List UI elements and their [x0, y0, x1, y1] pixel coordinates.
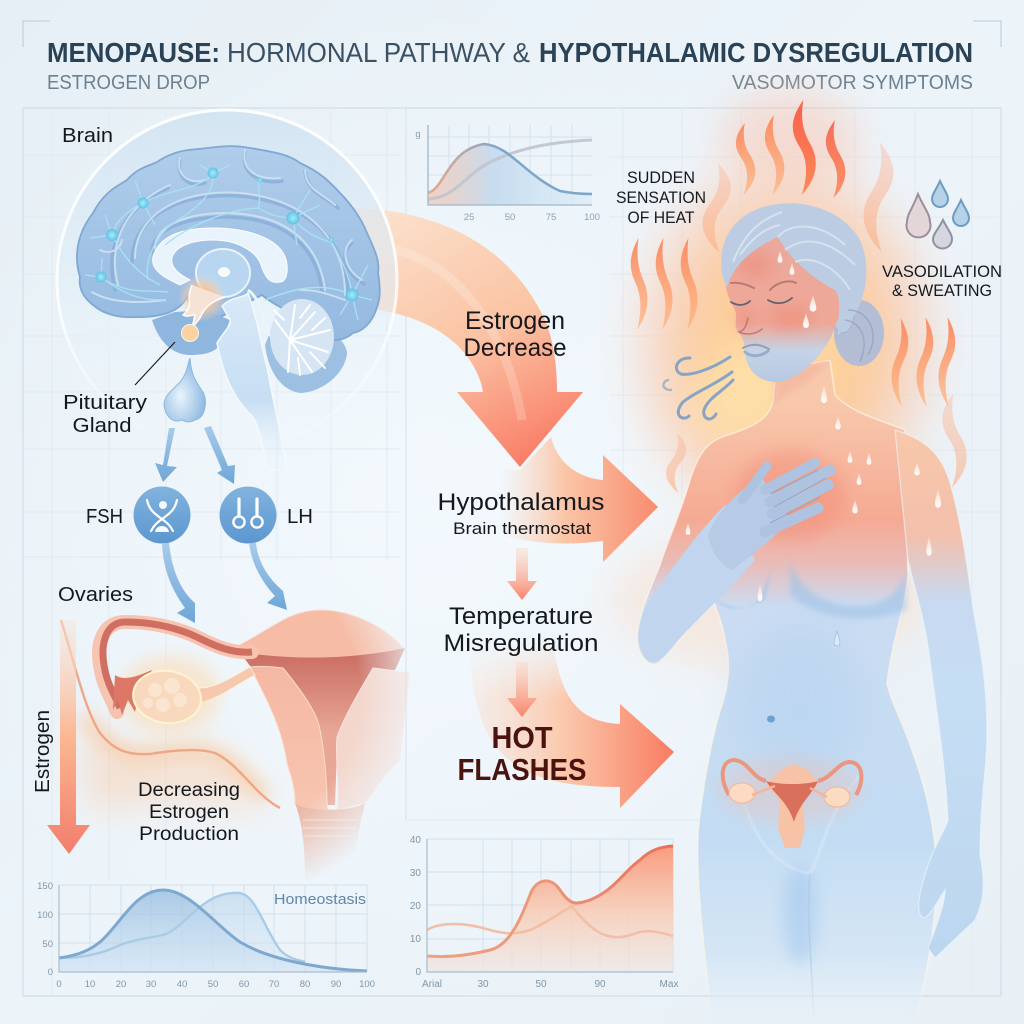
neck shadow: [773, 360, 830, 405]
label: temperature misregulation: [444, 603, 598, 657]
icon: sweat droplets: [906, 181, 969, 248]
chart: top centre estrogen curves: 75: [546, 212, 556, 223]
label: brain: Brain: [62, 125, 113, 147]
label: sudden sensation of heat: OF HEAT: [628, 209, 694, 227]
chest flush: [735, 450, 845, 540]
icon: breath wind lines: [663, 357, 733, 419]
left uterine wall: [250, 666, 328, 812]
chart: homeostasis hormone curves: 0: [56, 979, 62, 990]
ovary glow: [120, 655, 220, 735]
ovary: [132, 670, 202, 724]
pituitary gland droplet: [164, 358, 205, 422]
cerebellum back: [265, 320, 347, 393]
figure: woman with hot flash: [637, 203, 987, 1024]
chart: hot flash frequency curves: 40: [410, 835, 421, 846]
label: temperature misregulation: Misregulation: [444, 630, 598, 657]
label: sudden sensation of heat: [616, 169, 706, 227]
fallopian tube: [99, 622, 252, 712]
uterine cavity: [240, 648, 405, 805]
cerebrum: [77, 146, 380, 340]
icon: small reproductive organs on body: [718, 758, 862, 848]
brainstem: [217, 293, 287, 470]
cerebellum lobes: [270, 299, 334, 375]
chart: homeostasis hormone curves: 20: [116, 979, 126, 990]
small arrow: misregulation to hot flashes: [507, 662, 537, 717]
chart: homeostasis hormone curves: 100: [37, 910, 53, 921]
label: sudden sensation of heat: SUDDEN: [627, 169, 695, 187]
chart: homeostasis hormone curves: 70: [269, 979, 279, 990]
label: hot flashes: [458, 720, 586, 787]
fallopian tube inner: [103, 622, 252, 708]
label: estrogen decrease: Decrease: [464, 334, 566, 362]
arrow: to hot flashes: [470, 640, 674, 808]
chart: homeostasis hormone curves: [37, 881, 375, 990]
arrow: LH to uterus: [249, 543, 287, 610]
right uterine wall: [337, 668, 410, 810]
left arm: [895, 430, 987, 958]
chart: homeostasis hormone curves: 150: [37, 881, 53, 892]
hair: [721, 203, 866, 335]
chart: homeostasis hormone curves: 0: [48, 967, 53, 978]
subtitle: vasomotor symptoms: VASOMOTOR SYMPTOMS: [732, 72, 973, 94]
chart: hot flash frequency curves: Max: [660, 979, 678, 990]
arrow: estrogen downward: [47, 620, 90, 854]
label: decreasing estrogen production: Decreasing: [138, 780, 240, 801]
label: hot flashes: HOT: [492, 720, 553, 755]
title: [47, 37, 973, 68]
label: FSH: FSH: [86, 506, 123, 528]
small arrow: hypothalamus to misregulation: [507, 548, 537, 600]
uterus fundus: [228, 610, 405, 660]
pituitary stalk: [183, 285, 225, 328]
arrow: FSH to ovaries: [162, 543, 195, 623]
chart: hot flash frequency curves: 30: [477, 979, 489, 990]
flames: right of head: [666, 317, 967, 493]
label: vasodilation and sweating: & SWEATING: [892, 282, 992, 300]
lower limbic bowl: [152, 310, 230, 355]
arrow: estrogen decrease: [345, 208, 583, 467]
label: hypothalamus: Brain thermostat: [453, 519, 591, 538]
chart: hot flash frequency curves: 90: [594, 979, 606, 990]
thalamus: [196, 249, 250, 297]
neurons: [96, 168, 358, 302]
arrow: to vasomotor symptoms: [500, 437, 658, 562]
ear: [832, 293, 854, 333]
bun strands: [845, 310, 873, 362]
label: vasodilation and sweating: VASODILATION: [882, 263, 1002, 281]
arbor vitae: [248, 290, 290, 338]
label: hypothalamus: Hypothalamus: [438, 489, 604, 516]
raised forearm: [639, 505, 755, 662]
label: pituitary gland: Pituitary: [63, 392, 147, 414]
hair bun: [834, 300, 884, 366]
arrow highlight: [395, 250, 522, 420]
heat glow behind woman: [610, 90, 955, 670]
illustration: uterus and ovary: [99, 610, 410, 880]
chart: top centre estrogen curves: 25: [464, 212, 474, 223]
body shading: [712, 560, 906, 1024]
label: vasodilation and sweating: [882, 263, 1002, 300]
chart: homeostasis hormone curves: 40: [177, 979, 187, 990]
hypothalamus glow: [178, 274, 226, 322]
hair strands: [733, 212, 855, 290]
chart: hot flash frequency curves: 20: [410, 901, 421, 912]
facial features: [731, 281, 796, 356]
subtitle: estrogen drop: ESTROGEN DROP: [47, 72, 210, 94]
cheek flush: [737, 253, 812, 330]
cervix ridges: [303, 820, 358, 836]
label: decreasing estrogen production: Estrogen: [149, 802, 229, 823]
chart: top centre estrogen curves: 50: [505, 212, 515, 223]
arrow: pituitary to FSH: [155, 428, 177, 482]
illustration: brain sagittal section: [57, 110, 397, 470]
neural network lines: [85, 165, 372, 320]
label: decreasing estrogen production: Production: [139, 824, 239, 845]
corpus callosum: [153, 228, 287, 285]
title: HORMONAL PATHWAY &: [227, 37, 530, 68]
halo circle: [57, 110, 397, 450]
chart: homeostasis hormone curves: 80: [300, 979, 310, 990]
label: LH: LH: [287, 506, 313, 528]
icon: FSH badge: [134, 486, 190, 544]
chart: hot flash frequency curves: 10: [410, 934, 421, 945]
chart: homeostasis hormone curves: 60: [239, 979, 249, 990]
chart: hot flash frequency curves: 0: [415, 967, 421, 978]
chart: hot flash frequency curves: 30: [410, 868, 421, 879]
icon: LH badge: [220, 486, 276, 544]
chart: hot flash frequency curves: Arial: [422, 979, 442, 990]
chart: homeostasis hormone curves: 50: [42, 939, 53, 950]
chart: homeostasis hormone curves: 10: [85, 979, 95, 990]
flames around head: [703, 100, 893, 253]
title: HYPOTHALAMIC DYSREGULATION: [539, 37, 973, 68]
body silhouette: [637, 360, 987, 1024]
gyri folds: [92, 150, 362, 302]
cervix: [295, 803, 365, 880]
chart: hot flash frequency curves: 50: [535, 979, 547, 990]
label: decreasing estrogen production: [138, 780, 240, 845]
label: pituitary gland: [63, 392, 147, 437]
estrogen decline curve: [61, 620, 280, 810]
leader line: [135, 342, 175, 385]
hand: [708, 463, 830, 570]
thalamus highlight: [218, 267, 230, 277]
pituitary dot: [182, 324, 198, 342]
label: estrogen decrease: Estrogen: [465, 307, 565, 335]
label: estrogen axis: Estrogen: [32, 710, 54, 793]
title: MENOPAUSE:: [47, 37, 220, 68]
chart: top centre estrogen curves: g: [415, 129, 421, 140]
label: estrogen decrease: [464, 307, 566, 362]
arrow: pituitary to LH: [204, 426, 235, 484]
chart: homeostasis hormone curves: 30: [146, 979, 156, 990]
chart: top centre estrogen curves: [415, 125, 600, 223]
fimbriae: [113, 670, 152, 715]
sweat drops on skin: [686, 251, 941, 646]
ovarian ligament: [195, 667, 255, 704]
chart: homeostasis hormone curves: 50: [208, 979, 218, 990]
label: temperature misregulation: Temperature: [449, 603, 593, 630]
chart: hot flash frequency curves: [410, 835, 678, 990]
chart: homeostasis hormone curves: 90: [331, 979, 341, 990]
label: pituitary gland: Gland: [72, 415, 132, 437]
label: homeostasis: Homeostasis: [274, 891, 366, 908]
label: hypothalamus: [438, 489, 604, 538]
label: hot flashes: FLASHES: [458, 752, 586, 787]
face: [726, 215, 845, 382]
label: ovaries: Ovaries: [58, 584, 133, 606]
gyri creases: [112, 152, 364, 298]
chart: top centre estrogen curves: 100: [584, 212, 600, 223]
label: sudden sensation of heat: SENSATION: [616, 189, 706, 207]
ovary follicles: [143, 678, 187, 712]
chart: homeostasis hormone curves: 100: [359, 979, 375, 990]
flames: left of head: [631, 238, 698, 330]
